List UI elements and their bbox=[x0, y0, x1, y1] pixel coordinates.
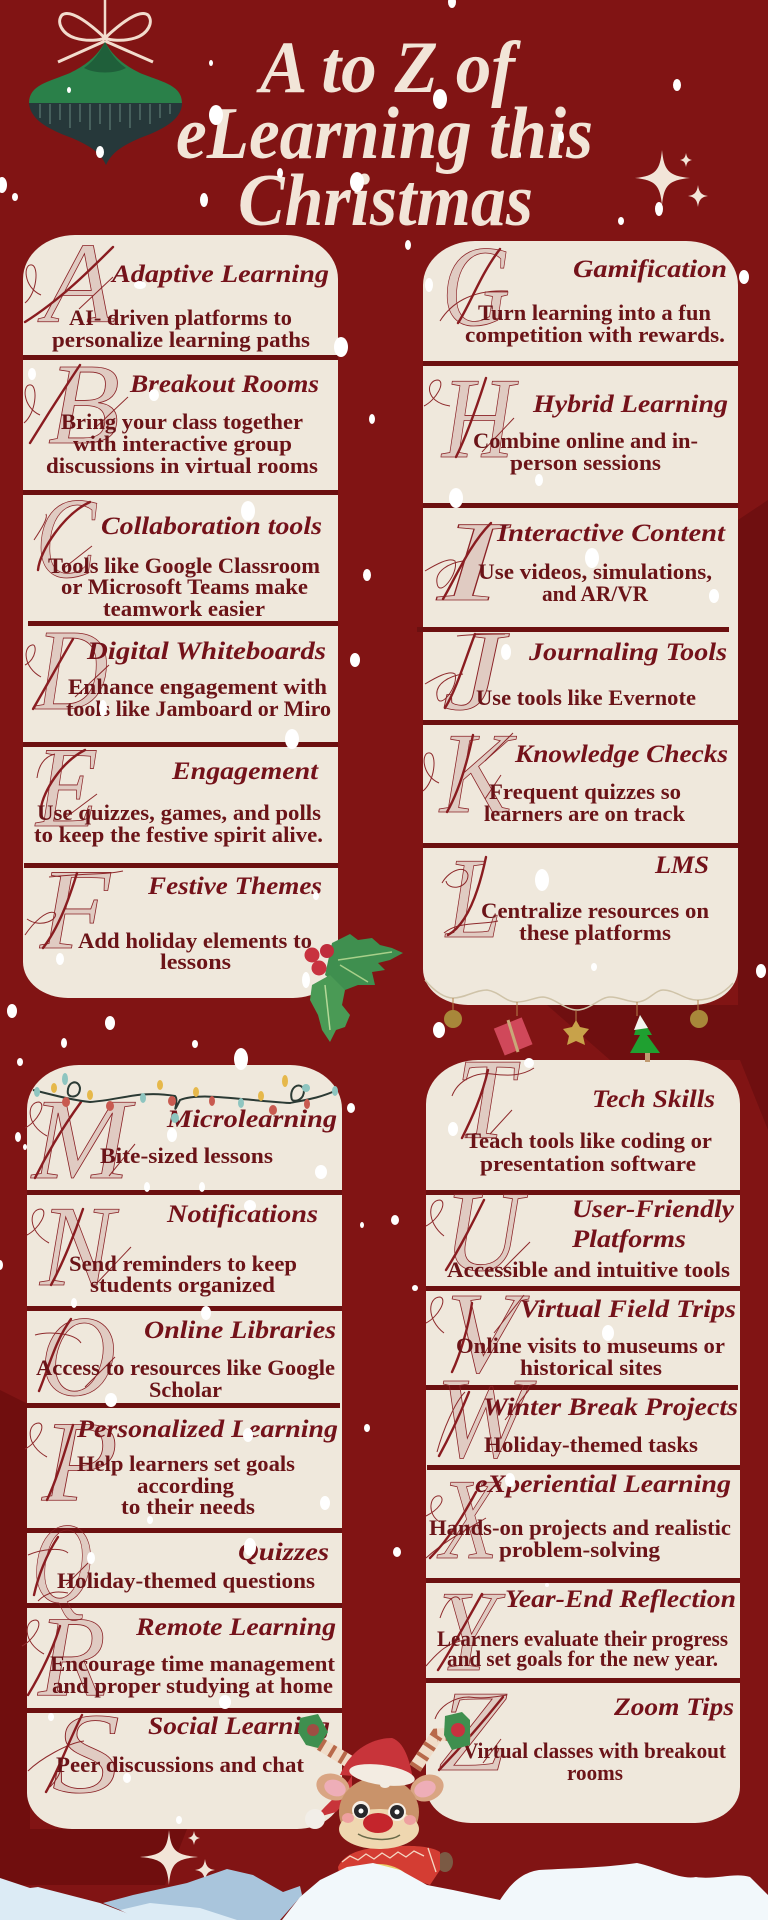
entry: Social Learning: S bbox=[52, 1690, 120, 1817]
entry: Festive Themes: F bbox=[39, 846, 112, 973]
entry: Social Learning bbox=[28, 1690, 330, 1817]
entry: Breakout Rooms: Breakout Rooms bbox=[129, 371, 319, 398]
entry: eXperiential Learning: Hands-on projects and realistic bbox=[429, 1515, 731, 1540]
entry: Microlearning: M bbox=[30, 1076, 136, 1203]
icon: reindeer with santa hat bbox=[298, 1712, 470, 1885]
entry: Quizzes: Holiday-themed questions bbox=[57, 1568, 315, 1593]
entry: Personalized Learning bbox=[25, 1398, 338, 1525]
entry: Adaptive Learning: personalize learning paths bbox=[52, 327, 310, 352]
entry: Journaling Tools: J bbox=[442, 607, 510, 734]
entry: Remote Learning: and proper studying at home bbox=[52, 1673, 333, 1698]
entry: Digital Whiteboards: Enhance engagement with bbox=[68, 674, 327, 699]
entry: LMS: LMS bbox=[654, 852, 709, 879]
entry: Hybrid Learning: person sessions bbox=[510, 450, 661, 475]
entry: Zoom Tips: Z bbox=[438, 1668, 507, 1795]
entry: Virtual Field Trips: V bbox=[446, 1270, 530, 1397]
icon: string of fairy lights bbox=[33, 1073, 338, 1123]
entry: Journaling Tools: Journaling Tools bbox=[528, 639, 727, 666]
entry: Online Libraries: Online Libraries bbox=[144, 1317, 336, 1344]
entry: Notifications: Send reminders to keep bbox=[69, 1251, 297, 1276]
entry: LMS: L bbox=[444, 835, 502, 962]
entry: Hybrid Learning bbox=[424, 355, 728, 482]
entry: Journaling Tools: Use tools like Evernote bbox=[476, 685, 696, 710]
title: A to Z of bbox=[256, 27, 521, 109]
entry: Online Libraries bbox=[35, 1293, 336, 1420]
entry: Collaboration tools bbox=[34, 475, 322, 621]
entry: Tech Skills bbox=[452, 1036, 715, 1176]
icon: sparkles top right bbox=[635, 150, 708, 207]
entry: Collaboration tools: or Microsoft Teams make bbox=[61, 574, 308, 599]
entry: Interactive Content: and AR/VR bbox=[542, 581, 649, 606]
entry: Adaptive Learning: A bbox=[37, 220, 115, 347]
entry: Personalized Learning: P bbox=[41, 1398, 118, 1525]
entry: Virtual Field Trips: historical sites bbox=[520, 1355, 662, 1380]
entry: Quizzes bbox=[28, 1500, 329, 1627]
entry: User-Friendly Platforms: User-Friendly bbox=[572, 1196, 735, 1223]
entry: Winter Break Projects: Holiday-themed tasks bbox=[484, 1432, 698, 1457]
entry: Personalized Learning: Personalized Learning bbox=[76, 1416, 338, 1443]
entry: Virtual Field Trips: Online visits to museums or bbox=[456, 1333, 725, 1358]
entry: Zoom Tips: Zoom Tips bbox=[613, 1694, 734, 1721]
entry: Personalized Learning: to their needs bbox=[121, 1494, 255, 1519]
entry: Virtual Field Trips bbox=[426, 1270, 736, 1397]
entry: Remote Learning: R bbox=[37, 1593, 106, 1720]
icon: hanging ornament bbox=[29, 0, 182, 165]
title: Christmas bbox=[238, 160, 533, 242]
entry: Zoom Tips: Virtual classes with breakout bbox=[463, 1738, 727, 1763]
entry: Collaboration tools: Tools like Google Classroom bbox=[48, 553, 320, 578]
entry: Remote Learning: Remote Learning bbox=[135, 1614, 336, 1641]
entry: LMS bbox=[442, 835, 709, 962]
card background bbox=[423, 241, 738, 1005]
entry: Knowledge Checks: K bbox=[438, 710, 517, 837]
entry: Engagement: to keep the festive spirit alive. bbox=[34, 822, 323, 847]
entry: Online Libraries: Scholar bbox=[149, 1377, 222, 1402]
entry: Personalized Learning: Help learners set goals bbox=[77, 1451, 295, 1476]
entry: Virtual Field Trips: Virtual Field Trips bbox=[520, 1296, 736, 1323]
entry: Remote Learning: Encourage time management bbox=[50, 1651, 336, 1676]
entry: Year-End Reflection: Y bbox=[438, 1568, 506, 1695]
entry: User-Friendly Platforms: U bbox=[444, 1168, 529, 1295]
entry: Engagement: Use quizzes, games, and polls bbox=[37, 800, 321, 825]
card background bbox=[426, 1060, 740, 1823]
entry: Knowledge Checks: learners are on track bbox=[484, 801, 686, 826]
entry: Digital Whiteboards: D bbox=[34, 607, 108, 734]
card background bbox=[27, 1065, 342, 1829]
icon: holly sprig bbox=[304, 934, 403, 1042]
entry: Tech Skills: presentation software bbox=[480, 1151, 696, 1176]
entry: Microlearning: Bite-sized lessons bbox=[100, 1143, 273, 1168]
entry: Knowledge Checks: Knowledge Checks bbox=[514, 741, 728, 768]
entry: Festive Themes: Festive Themes bbox=[147, 873, 322, 900]
entry: Microlearning: Microlearning bbox=[166, 1106, 337, 1133]
icon: sparkles bottom left bbox=[140, 1830, 215, 1885]
entry: Winter Break Projects bbox=[436, 1355, 738, 1482]
entry: Personalized Learning: according bbox=[137, 1473, 234, 1498]
entry: Knowledge Checks: Frequent quizzes so bbox=[489, 779, 681, 804]
entry: Winter Break Projects: Winter Break Projects bbox=[483, 1394, 738, 1421]
entry: Interactive Content bbox=[425, 498, 726, 625]
panel: letters T to Z bbox=[426, 1036, 740, 1823]
entry: User-Friendly Platforms bbox=[426, 1168, 735, 1295]
entry: Collaboration tools: teamwork easier bbox=[103, 596, 265, 621]
entry: Tech Skills: Teach tools like coding or bbox=[466, 1128, 712, 1153]
panel: letters A to F bbox=[23, 220, 338, 998]
entry: eXperiential Learning bbox=[426, 1456, 731, 1583]
entry: Online Libraries: Access to resources like Google bbox=[36, 1355, 335, 1380]
entry: Knowledge Checks bbox=[423, 710, 728, 837]
entry: Microlearning bbox=[25, 1076, 337, 1203]
icon: snow drifts bbox=[0, 1863, 768, 1920]
entry: Collaboration tools: C bbox=[36, 475, 97, 602]
entry: Social Learning: Peer discussions and chat bbox=[56, 1752, 305, 1777]
entry: Year-End Reflection: Year-End Reflection bbox=[505, 1586, 736, 1613]
panel: letters G to L bbox=[417, 223, 738, 1005]
entry: Festive Themes: lessons bbox=[160, 949, 231, 974]
entry: Year-End Reflection: and set goals for the new year. bbox=[447, 1646, 718, 1671]
title bbox=[176, 27, 593, 242]
entry: Quizzes: Q bbox=[32, 1500, 92, 1627]
entry: Tech Skills: T bbox=[456, 1036, 520, 1163]
entry: Breakout Rooms: with interactive group bbox=[73, 431, 292, 456]
entry: Digital Whiteboards bbox=[25, 607, 331, 734]
entry: Remote Learning bbox=[22, 1593, 336, 1720]
entry: Hybrid Learning: Combine online and in- bbox=[473, 428, 698, 453]
entry: Gamification: Gamification bbox=[573, 256, 727, 283]
entry: Hybrid Learning: Hybrid Learning bbox=[532, 391, 728, 418]
entry: Breakout Rooms bbox=[24, 341, 319, 478]
entry: Adaptive Learning bbox=[25, 220, 329, 352]
entry: Zoom Tips bbox=[435, 1668, 734, 1795]
entry: User-Friendly Platforms: Accessible and intuitive tools bbox=[447, 1257, 730, 1282]
entry: Hybrid Learning: H bbox=[440, 355, 519, 482]
entry: Gamification bbox=[440, 223, 727, 350]
entry: Winter Break Projects: W bbox=[436, 1355, 537, 1482]
entry: Gamification: Turn learning into a fun bbox=[478, 300, 711, 325]
entry: User-Friendly Platforms: Platforms bbox=[571, 1226, 686, 1253]
entry: Interactive Content: Interactive Content bbox=[496, 520, 726, 547]
entry: Tech Skills: Tech Skills bbox=[592, 1086, 715, 1113]
entry: LMS: Centralize resources on bbox=[481, 898, 709, 923]
entry: Collaboration tools: Collaboration tools bbox=[101, 513, 322, 540]
entry: Year-End Reflection: Learners evaluate their progress bbox=[437, 1626, 728, 1651]
title: eLearning this bbox=[176, 93, 593, 175]
entry: LMS: these platforms bbox=[519, 920, 671, 945]
entry: Digital Whiteboards: tools like Jamboard or Miro bbox=[66, 696, 331, 721]
entry: Gamification: competition with rewards. bbox=[465, 322, 725, 347]
entry: Engagement: E bbox=[34, 724, 98, 851]
card background bbox=[23, 235, 338, 998]
entry: Notifications: Notifications bbox=[166, 1201, 318, 1228]
entry: Zoom Tips: rooms bbox=[567, 1760, 623, 1785]
entry: Social Learning: Social Learning bbox=[148, 1713, 330, 1740]
entry: Journaling Tools bbox=[425, 607, 727, 734]
entry: Adaptive Learning: AI- driven platforms to bbox=[69, 305, 292, 330]
entry: Festive Themes: Add holiday elements to bbox=[78, 928, 312, 953]
entry: Engagement: Engagement bbox=[171, 758, 319, 785]
entry: Engagement bbox=[34, 724, 323, 851]
entry: Notifications: N bbox=[39, 1183, 120, 1310]
entry: eXperiential Learning: problem-solving bbox=[499, 1537, 660, 1562]
entry: Gamification: G bbox=[442, 223, 510, 350]
entry: eXperiential Learning: X bbox=[437, 1456, 501, 1583]
entry: Interactive Content: Use videos, simulations, bbox=[478, 559, 712, 584]
entry: Interactive Content: I bbox=[435, 498, 511, 625]
entry: Festive Themes bbox=[25, 846, 322, 974]
entry: Breakout Rooms: B bbox=[48, 341, 120, 468]
entry: Year-End Reflection bbox=[426, 1568, 736, 1695]
entry: Adaptive Learning: Adaptive Learning bbox=[110, 261, 329, 288]
entry: eXperiential Learning: eXperiential Learning bbox=[475, 1471, 731, 1498]
entry: Notifications bbox=[27, 1183, 318, 1310]
entry: Digital Whiteboards: Digital Whiteboards bbox=[86, 638, 326, 665]
entry: Breakout Rooms: Bring your class together bbox=[61, 409, 303, 434]
entry: Quizzes: Quizzes bbox=[238, 1539, 329, 1566]
entry: Notifications: students organized bbox=[90, 1272, 275, 1297]
entry: Online Libraries: O bbox=[40, 1293, 116, 1420]
entry: Breakout Rooms: discussions in virtual rooms bbox=[46, 453, 318, 478]
panel: letters M to S bbox=[22, 1065, 342, 1829]
icon: garland with hanging decorations bbox=[425, 980, 733, 1062]
